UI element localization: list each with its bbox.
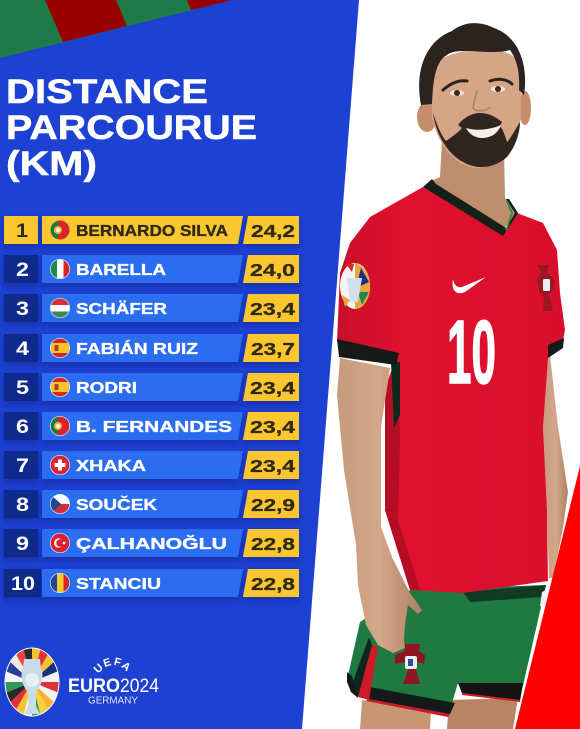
name bar bbox=[42, 294, 243, 322]
value: 23,7 bbox=[251, 339, 295, 359]
name bar bbox=[42, 529, 243, 557]
value: 24,2 bbox=[251, 221, 295, 241]
eyes bbox=[450, 86, 505, 96]
flag: Switzerland bbox=[50, 455, 71, 475]
collar bbox=[423, 179, 518, 236]
rank 7 bbox=[4, 451, 38, 479]
right arm bbox=[543, 350, 568, 578]
row 8: Souček bbox=[4, 490, 299, 518]
flag: Spain bbox=[50, 338, 71, 358]
name bar bbox=[42, 255, 243, 283]
name bar bbox=[42, 334, 243, 362]
name bar: FABIÁN RUIZ bbox=[76, 341, 199, 358]
beard bbox=[433, 113, 520, 167]
name bar: B. FERNANDES bbox=[76, 419, 232, 436]
flag: Czechia bbox=[50, 494, 71, 514]
corner: red slanted shape bbox=[515, 466, 580, 729]
logo: UEFA Euro 2024 Germany: GERMANY bbox=[88, 696, 138, 706]
value: 24,0 bbox=[250, 260, 295, 280]
name bar bbox=[42, 451, 243, 479]
row 7: Xhaka bbox=[4, 451, 299, 479]
rank 8 bbox=[4, 490, 38, 518]
right sleeve cuff bbox=[548, 338, 564, 358]
flag: Italy bbox=[50, 259, 70, 279]
value: 22,8 bbox=[251, 534, 295, 554]
left sleeve cuff bbox=[337, 339, 399, 365]
name bar bbox=[42, 412, 243, 440]
mouth bbox=[466, 125, 501, 138]
value bbox=[243, 529, 299, 557]
rank 3 bbox=[4, 294, 38, 322]
row 6: B. Fernandes bbox=[4, 412, 299, 440]
row 1: Bernardo Silva bbox=[4, 216, 299, 244]
rank 5 bbox=[4, 373, 38, 401]
name bar: ÇALHANOĞLU bbox=[76, 535, 227, 553]
name bar bbox=[42, 490, 243, 518]
player: Bernardo Silva bbox=[337, 23, 568, 729]
name bar: STANCIU bbox=[76, 576, 161, 593]
name bar: XHAKA bbox=[76, 458, 146, 475]
flag: Portugal bbox=[50, 416, 70, 436]
top stripes: green and red bbox=[0, 0, 240, 60]
value: 23,4 bbox=[250, 299, 295, 319]
rank 10 bbox=[4, 569, 41, 597]
side stripe bbox=[391, 362, 400, 428]
row 3: Schäfer bbox=[4, 294, 299, 322]
shorts bbox=[347, 585, 546, 717]
right leg bbox=[447, 698, 518, 729]
player: Bernardo Silva: 10 bbox=[447, 303, 496, 403]
ranking table bbox=[4, 216, 299, 597]
logo: UEFA Euro 2024 Germany: 2024 bbox=[120, 676, 159, 697]
rank 3: 3 bbox=[16, 299, 29, 320]
value: 22,9 bbox=[251, 495, 295, 515]
rank 7: 7 bbox=[16, 456, 29, 477]
title: (KM) bbox=[6, 145, 97, 183]
logo: UEFA Euro 2024 Germany: EURO bbox=[68, 676, 120, 697]
crest on shirt bbox=[537, 265, 555, 311]
neck bbox=[431, 140, 517, 230]
row 10: Stanciu bbox=[4, 569, 299, 597]
jersey bbox=[337, 187, 565, 593]
rank 2: 2 bbox=[16, 260, 29, 281]
value bbox=[243, 412, 299, 440]
value: 23,4 bbox=[250, 456, 295, 476]
title: PARCOURUE bbox=[6, 109, 257, 147]
rank 6: 6 bbox=[16, 417, 29, 438]
logo: UEFA Euro 2024 Germany bbox=[68, 657, 159, 706]
rank 1 bbox=[4, 216, 38, 244]
value bbox=[243, 569, 299, 597]
logo: UEFA Euro 2024 Germany: UEFA bbox=[93, 657, 130, 672]
rank 1: 1 bbox=[16, 221, 28, 242]
crest on shorts bbox=[395, 644, 425, 684]
face bbox=[432, 49, 521, 168]
name bar: SCHÄFER bbox=[76, 301, 167, 318]
value bbox=[243, 294, 299, 322]
rank 4: 4 bbox=[16, 339, 30, 360]
nose bbox=[473, 90, 490, 111]
name bar: BERNARDO SILVA bbox=[76, 223, 228, 240]
value bbox=[243, 255, 299, 283]
left leg bbox=[360, 700, 431, 729]
rank 5: 5 bbox=[16, 378, 30, 399]
value bbox=[243, 373, 299, 401]
name bar bbox=[42, 373, 243, 401]
rank 9: 9 bbox=[16, 534, 29, 555]
side panel shading bbox=[385, 358, 420, 590]
value bbox=[243, 334, 299, 362]
icon: Euro 2024 trophy logo bbox=[4, 648, 60, 716]
flag: Portugal bbox=[50, 220, 70, 240]
flag: Turkey bbox=[50, 533, 71, 553]
left arm bbox=[337, 358, 422, 653]
rank 9 bbox=[4, 529, 38, 557]
title: DISTANCE bbox=[6, 73, 208, 111]
flag: Romania bbox=[50, 573, 70, 593]
name bar: RODRI bbox=[76, 380, 137, 397]
name bar bbox=[42, 569, 243, 597]
value: 23,4 bbox=[250, 378, 295, 398]
name bar bbox=[42, 216, 243, 244]
flag: Hungary bbox=[50, 298, 71, 318]
value bbox=[243, 490, 299, 518]
eyebrows bbox=[443, 79, 512, 90]
value bbox=[243, 216, 299, 244]
title bbox=[6, 73, 257, 183]
row 2: Barella bbox=[4, 255, 299, 283]
rank 8: 8 bbox=[16, 495, 29, 516]
hair bbox=[419, 23, 525, 105]
rank 10: 10 bbox=[11, 574, 35, 595]
shorts logo bbox=[540, 590, 546, 608]
row 4: Fabián Ruiz bbox=[4, 334, 299, 362]
rank 4 bbox=[4, 334, 38, 362]
rank 6 bbox=[4, 412, 38, 440]
swoosh bbox=[453, 277, 486, 293]
value: 23,4 bbox=[250, 417, 295, 437]
name bar: SOUČEK bbox=[76, 496, 158, 514]
ears bbox=[417, 91, 531, 132]
value: 22,8 bbox=[251, 574, 295, 594]
name bar: BARELLA bbox=[76, 262, 166, 279]
value bbox=[243, 451, 299, 479]
panel: blue slanted background bbox=[0, 0, 359, 729]
sleeve badge bbox=[340, 263, 370, 309]
flag: Spain bbox=[50, 377, 71, 397]
rank 2 bbox=[4, 255, 38, 283]
row 9: Çalhanoğlu bbox=[4, 529, 299, 557]
row 5: Rodri bbox=[4, 373, 299, 401]
